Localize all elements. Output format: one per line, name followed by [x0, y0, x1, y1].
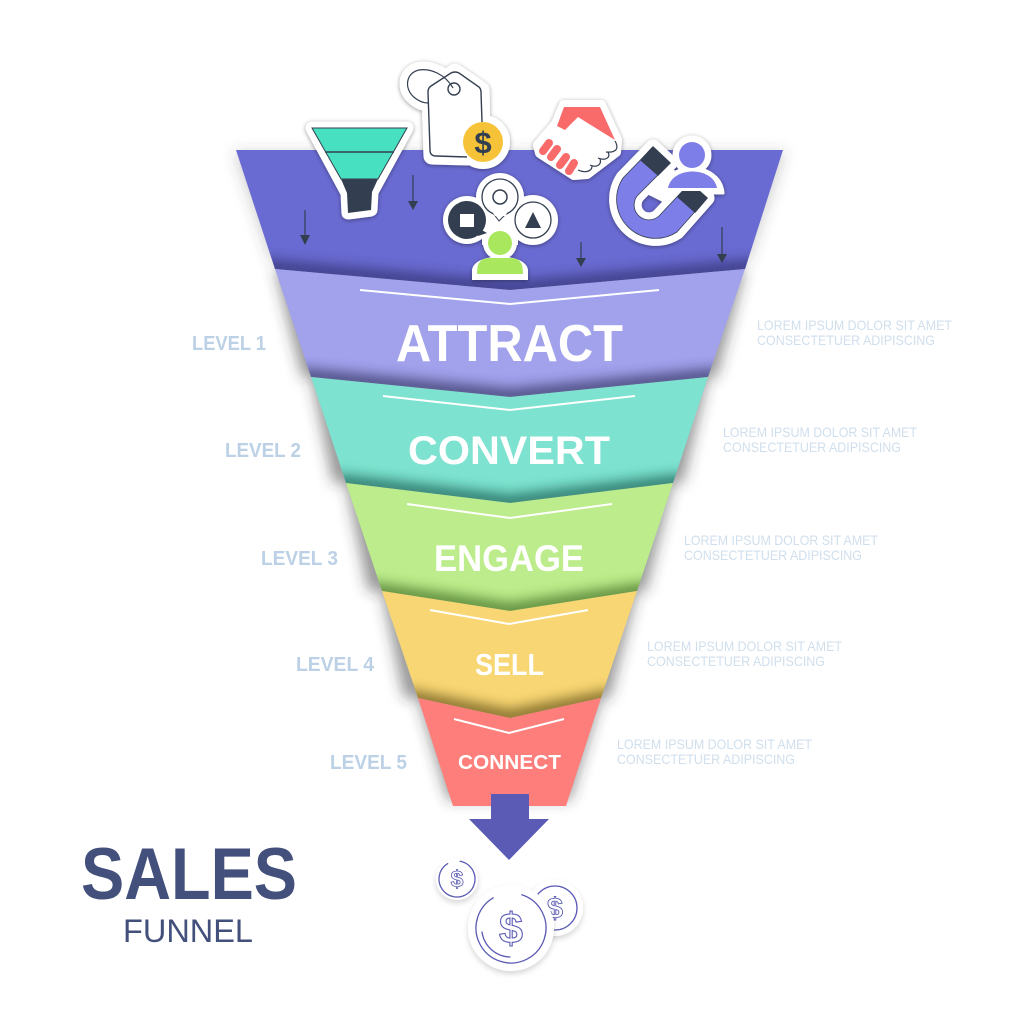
- coins: [436, 858, 583, 972]
- band: convert: [311, 377, 708, 503]
- coin: large: $: [499, 905, 523, 953]
- text: level 3 description: CONSECTETUER ADIPISCING: [684, 547, 862, 563]
- level labels: LEVEL 4: [296, 654, 375, 676]
- band: sell: [382, 591, 637, 718]
- text: level 4 description: LOREM IPSUM DOLOR SIT AMET: [647, 638, 842, 654]
- coin: medium: [527, 880, 583, 936]
- level labels: LEVEL 3: [261, 548, 338, 570]
- text: level 2 description: CONSECTETUER ADIPISCING: [723, 439, 901, 455]
- coin: small: $: [451, 866, 464, 892]
- text: level 3 description: [684, 532, 878, 563]
- level labels: LEVEL 5: [330, 752, 407, 774]
- coin: medium: $: [547, 893, 563, 925]
- band: attract: [275, 269, 745, 397]
- band: sell: SELL: [475, 647, 544, 682]
- icon: funnel: [312, 128, 407, 213]
- band: attract: ATTRACT: [396, 315, 623, 373]
- icon: magnet with person: [617, 136, 723, 238]
- text: level 3 description: LOREM IPSUM DOLOR SIT AMET: [684, 532, 878, 548]
- funnel outer shadow: [234, 152, 785, 800]
- funnel: [236, 150, 783, 806]
- band: engage: [346, 483, 673, 611]
- text: level 1 description: LOREM IPSUM DOLOR SIT AMET: [757, 317, 952, 333]
- text: level 1 description: [757, 317, 952, 348]
- text: level 5 description: CONSECTETUER ADIPISCING: [617, 751, 795, 767]
- level labels: LEVEL 1: [192, 333, 266, 355]
- description text blocks: [617, 317, 952, 767]
- small arrow 1: [300, 210, 310, 245]
- small arrow 3: [576, 242, 586, 267]
- text: level 5 description: [617, 736, 812, 767]
- band: connect: CONNECT: [458, 752, 561, 774]
- text: level 2 description: LOREM IPSUM DOLOR SIT AMET: [723, 424, 917, 440]
- icon: handshake: [538, 105, 617, 175]
- coin: large: [467, 884, 555, 972]
- text: level 1 description: CONSECTETUER ADIPISCING: [757, 332, 935, 348]
- text: level 2 description: [723, 424, 917, 455]
- small arrow 4: [717, 227, 727, 263]
- small arrow 2: [408, 175, 418, 210]
- bottom arrow: [469, 794, 549, 860]
- band: top intake: [236, 150, 783, 290]
- icon: price tag: [408, 70, 507, 166]
- text: level 4 description: CONSECTETUER ADIPISCING: [647, 653, 825, 669]
- title: [81, 834, 297, 949]
- icon: price tag: $: [474, 125, 492, 160]
- title: SALES: [81, 834, 297, 915]
- text: level 5 description: LOREM IPSUM DOLOR SIT AMET: [617, 736, 812, 752]
- level labels: LEVEL 2: [225, 440, 301, 462]
- level labels: [192, 333, 407, 774]
- title: FUNNEL: [123, 913, 253, 949]
- text: level 4 description: [647, 638, 842, 669]
- band: engage: ENGAGE: [434, 538, 584, 579]
- coin: small: [436, 858, 478, 900]
- band: connect: [418, 698, 601, 806]
- band: convert: CONVERT: [408, 429, 610, 473]
- icon: person with speech bubbles: [443, 173, 558, 280]
